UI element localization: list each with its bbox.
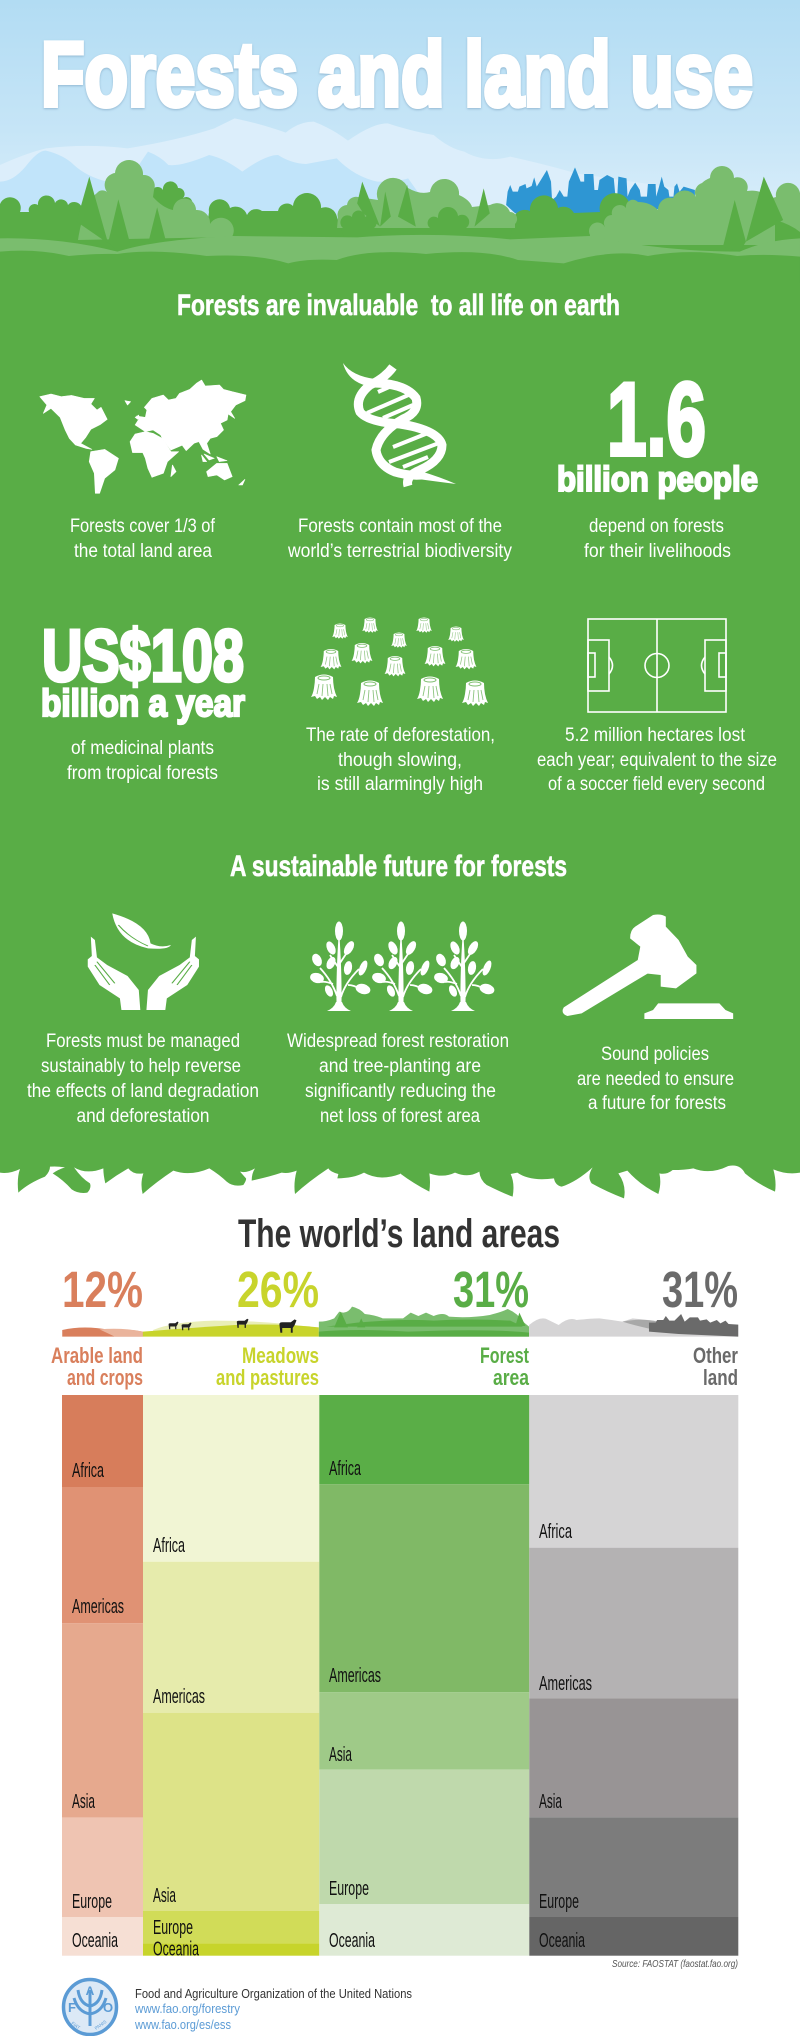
panel: restoration <box>287 922 509 1127</box>
column: meadows and pastures: Europe <box>153 1916 193 1939</box>
category labels: Arable land <box>51 1343 143 1368</box>
panel: soccer field <box>537 619 777 795</box>
column: arable land: Americas <box>72 1595 124 1618</box>
icon: FAO logo: FIAT <box>70 2021 81 2030</box>
big label: billion people: billion people <box>557 460 758 499</box>
text: hectares lost: of a soccer field every second <box>548 774 765 795</box>
text: deforestation <box>306 725 495 795</box>
text: policies: are needed to ensure <box>577 1069 734 1090</box>
text: forest cover: the total land area <box>74 541 212 562</box>
text: biodiversity: Forests contain most of the <box>298 516 502 537</box>
panel: 1.6 billion people <box>557 362 758 562</box>
big number: US$108: US$108 <box>42 616 244 697</box>
organization text and links: www.fao.org/forestry <box>134 2002 241 2016</box>
text: biodiversity <box>287 516 512 562</box>
text: restoration: and tree-planting are <box>319 1056 481 1077</box>
text: medicinal plants <box>67 738 218 784</box>
column: other land <box>529 1395 738 1956</box>
text: livelihoods: depend on forests <box>589 516 724 537</box>
column: forest area: Africa <box>329 1457 361 1480</box>
column: meadows and pastures: Oceania <box>153 1938 199 1960</box>
heading: world's land areas: The world’s land areas <box>238 1212 560 1256</box>
text: policies: a future for forests <box>588 1093 726 1114</box>
text: managed forests: the effects of land degradation <box>27 1081 259 1102</box>
panel: managed forests <box>27 913 259 1127</box>
percentages: 31% <box>662 1261 738 1318</box>
big number: 1.6: 1.6 <box>607 362 706 478</box>
text: livelihoods: for their livelihoods <box>584 541 731 562</box>
text: restoration: net loss of forest area <box>320 1106 480 1127</box>
grass bands <box>0 235 800 283</box>
column: meadows and pastures: Americas <box>153 1685 205 1708</box>
category labels: Meadows <box>242 1343 319 1368</box>
heading: sustainable future: A sustainable future for forests <box>230 850 567 883</box>
column: meadows and pastures: Asia <box>153 1884 176 1907</box>
text: livelihoods <box>584 516 731 562</box>
text: managed forests: sustainably to help reverse <box>41 1056 241 1077</box>
panel: deforestation <box>306 618 495 795</box>
column: forest area <box>319 1395 529 1956</box>
icon: FAO logo: F <box>68 2000 76 2015</box>
text: managed forests: and deforestation <box>76 1106 210 1127</box>
text: biodiversity: world’s terrestrial biodiversity <box>287 541 512 562</box>
icon: FAO logo: O <box>103 2000 113 2015</box>
column: arable land: Oceania <box>72 1929 118 1952</box>
text: restoration: Widespread forest restoration <box>287 1031 509 1052</box>
text: managed forests: Forests must be managed <box>46 1031 240 1052</box>
icon: tree stumps <box>311 618 488 706</box>
light green tree clusters <box>78 160 800 245</box>
percentages: 26% <box>237 1261 319 1318</box>
source note: Source: FAOSTAT (faostat.fao.org) <box>612 1958 738 1970</box>
column: arable land: Asia <box>72 1790 95 1813</box>
text: deforestation: The rate of deforestation, <box>306 725 495 746</box>
column: arable land <box>62 1395 143 1956</box>
panel: medicinal plants <box>41 616 245 784</box>
green main panel <box>0 250 800 1152</box>
category labels: area <box>493 1365 530 1390</box>
icon: soccer pitch <box>588 619 726 712</box>
icon: FAO logo <box>64 1980 116 2034</box>
percentages <box>62 1261 738 1318</box>
column: other land: Europe <box>539 1890 579 1913</box>
column: meadows and pastures <box>143 1395 319 1960</box>
text: deforestation: though slowing, <box>338 750 462 771</box>
leaf fringe bottom edge of the green panel <box>0 1150 800 1198</box>
strip shapes <box>62 1307 738 1337</box>
heading: invaluable: Forests are invaluable to all life on earth <box>177 289 620 322</box>
column: forest area: Oceania <box>329 1929 375 1952</box>
category labels <box>51 1343 738 1390</box>
icon: grazing cows <box>169 1319 296 1333</box>
text: forest cover <box>70 516 216 562</box>
icon: DNA helix <box>343 363 456 486</box>
header sky background <box>0 0 800 260</box>
category labels: Forest <box>480 1343 529 1368</box>
text: hectares lost: 5.2 million hectares lost <box>565 725 746 746</box>
column: meadows and pastures: Africa <box>153 1534 185 1557</box>
panel: biodiversity <box>287 363 512 562</box>
big label: billion a year: billion a year <box>41 683 245 725</box>
text: deforestation: is still alarmingly high <box>317 774 483 795</box>
mountains and city skyline <box>0 118 800 233</box>
text: medicinal plants: from tropical forests <box>67 763 218 784</box>
column: other land: Americas <box>539 1672 592 1695</box>
text: forest cover: Forests cover 1/3 of <box>70 516 216 537</box>
category labels: and pastures <box>216 1365 319 1390</box>
category labels: land <box>703 1365 738 1390</box>
conifers and foreground shrubs <box>77 177 800 252</box>
icon: saplings <box>309 922 496 1011</box>
icon: FAO logo: A <box>86 1984 95 1998</box>
text: restoration <box>287 1031 509 1127</box>
column: other land: Asia <box>539 1790 562 1813</box>
category labels: and crops <box>67 1365 143 1390</box>
column: forest area: Europe <box>329 1877 369 1900</box>
text: restoration: significantly reducing the <box>305 1081 496 1102</box>
stacked chart: land areas by region <box>62 1395 738 1960</box>
organization text and links: Food and Agriculture Organization of the United Nations <box>135 1987 412 2001</box>
panel: policies <box>563 914 734 1114</box>
dark green shrubs row <box>0 181 800 256</box>
text: medicinal plants: of medicinal plants <box>71 738 214 759</box>
organization text and links: www.fao.org/es/ess <box>134 2018 231 2032</box>
land use strip illustrations <box>62 1307 738 1337</box>
organization text and links <box>134 1987 412 2032</box>
icon: hands and leaf <box>88 913 199 1010</box>
icon: gavel <box>563 914 733 1019</box>
text: policies: Sound policies <box>601 1044 709 1065</box>
icon: FAO logo: PANIS <box>94 2019 107 2031</box>
text: hectares lost <box>537 725 777 795</box>
column: other land: Oceania <box>539 1929 585 1952</box>
text: managed forests <box>27 1031 259 1127</box>
column: other land: Africa <box>539 1520 572 1543</box>
column: forest area: Americas <box>329 1664 381 1687</box>
percentages: 31% <box>453 1261 529 1318</box>
percentages: 12% <box>62 1261 143 1318</box>
column: arable land: Europe <box>72 1890 112 1913</box>
icon: world map <box>40 380 246 493</box>
landscape illustration: mountains, trees, city <box>0 118 800 283</box>
text: policies <box>577 1044 734 1114</box>
panel: forest cover <box>40 380 246 562</box>
category labels: Other <box>693 1343 738 1368</box>
column: forest area: Asia <box>329 1743 352 1766</box>
column: arable land: Africa <box>72 1459 104 1482</box>
